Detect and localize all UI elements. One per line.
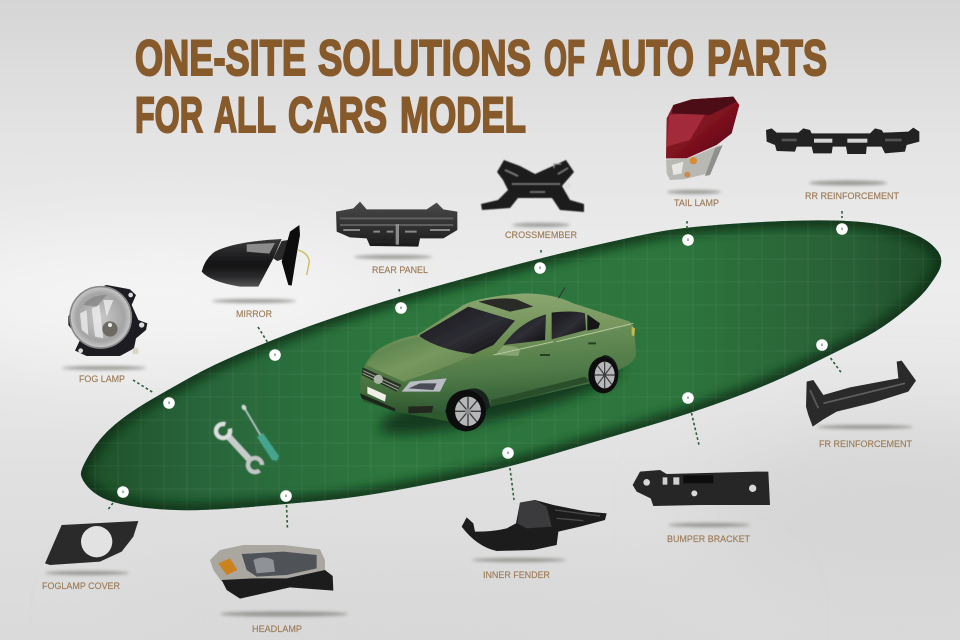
dashed leader lines [107, 211, 842, 530]
part: fog lamp [62, 285, 147, 385]
rear wheel [588, 357, 618, 393]
part: inner fender [462, 500, 607, 581]
icon: FR reinforcement [806, 361, 916, 427]
icon: RR reinforcement [766, 128, 919, 154]
label: crossmember: CROSSMEMBER [505, 230, 577, 241]
title: AUTO [596, 30, 694, 86]
label: rear panel: REAR PANEL [372, 265, 429, 276]
green tilted ellipse platform [80, 220, 942, 510]
part: foglamp cover [42, 521, 138, 592]
icon: crossmember [481, 160, 584, 212]
label: tail lamp: TAIL LAMP [674, 198, 719, 209]
shadow: RR reinforcement [809, 180, 887, 186]
label: mirror: MIRROR [236, 309, 272, 320]
title: ALL [214, 87, 276, 143]
label: fog lamp: FOG LAMP [79, 374, 125, 385]
shadow: headlamp [220, 612, 348, 616]
part: headlamp [210, 545, 348, 635]
shadow: FR reinforcement [817, 425, 913, 429]
label: bumper bracket: BUMPER BRACKET [667, 534, 750, 545]
shadow: foglamp cover [45, 571, 129, 575]
shadow: fog lamp [62, 366, 146, 370]
part: mirror [202, 225, 309, 320]
icon: headlamp [210, 545, 333, 599]
title: SOLUTIONS [318, 30, 531, 86]
label: RR reinforcement: RR REINFORCEMENT [805, 191, 899, 202]
label: inner fender: INNER FENDER [483, 570, 550, 581]
title [135, 30, 827, 143]
icon: tail lamp [666, 97, 739, 180]
title: PARTS [707, 30, 827, 86]
shadow: inner fender [472, 558, 566, 562]
icon: foglamp cover [45, 521, 138, 565]
title: FOR [135, 87, 203, 143]
title: MODEL [400, 87, 526, 143]
shadow: tail lamp [667, 190, 721, 194]
front wheel [446, 390, 486, 431]
label: FR reinforcement: FR REINFORCEMENT [819, 439, 912, 450]
part: tail lamp [666, 97, 739, 209]
title: CARS [288, 87, 387, 143]
part: FR reinforcement [806, 361, 916, 450]
label: headlamp: HEADLAMP [252, 624, 302, 635]
title: OF [544, 30, 585, 86]
icon: wrench and screwdriver [216, 404, 279, 472]
shadow: crossmember [512, 223, 570, 227]
connection dots [117, 223, 848, 502]
part: bumper bracket [633, 470, 770, 545]
icon: inner fender [462, 500, 607, 551]
part: rear panel [336, 202, 457, 276]
car [360, 287, 636, 431]
icon: bumper bracket [633, 470, 770, 506]
icon: mirror [202, 225, 309, 287]
part: RR reinforcement [766, 128, 919, 202]
shadow: mirror [212, 299, 296, 303]
icon: rear panel [336, 202, 457, 247]
car shadow [374, 348, 626, 448]
shadow: bumper bracket [668, 523, 750, 527]
part: crossmember [481, 160, 584, 241]
label: foglamp cover: FOGLAMP COVER [42, 581, 120, 592]
title: ONE-SITE [135, 30, 306, 86]
icon: fog lamp [68, 285, 147, 356]
shadow: rear panel [354, 255, 432, 259]
